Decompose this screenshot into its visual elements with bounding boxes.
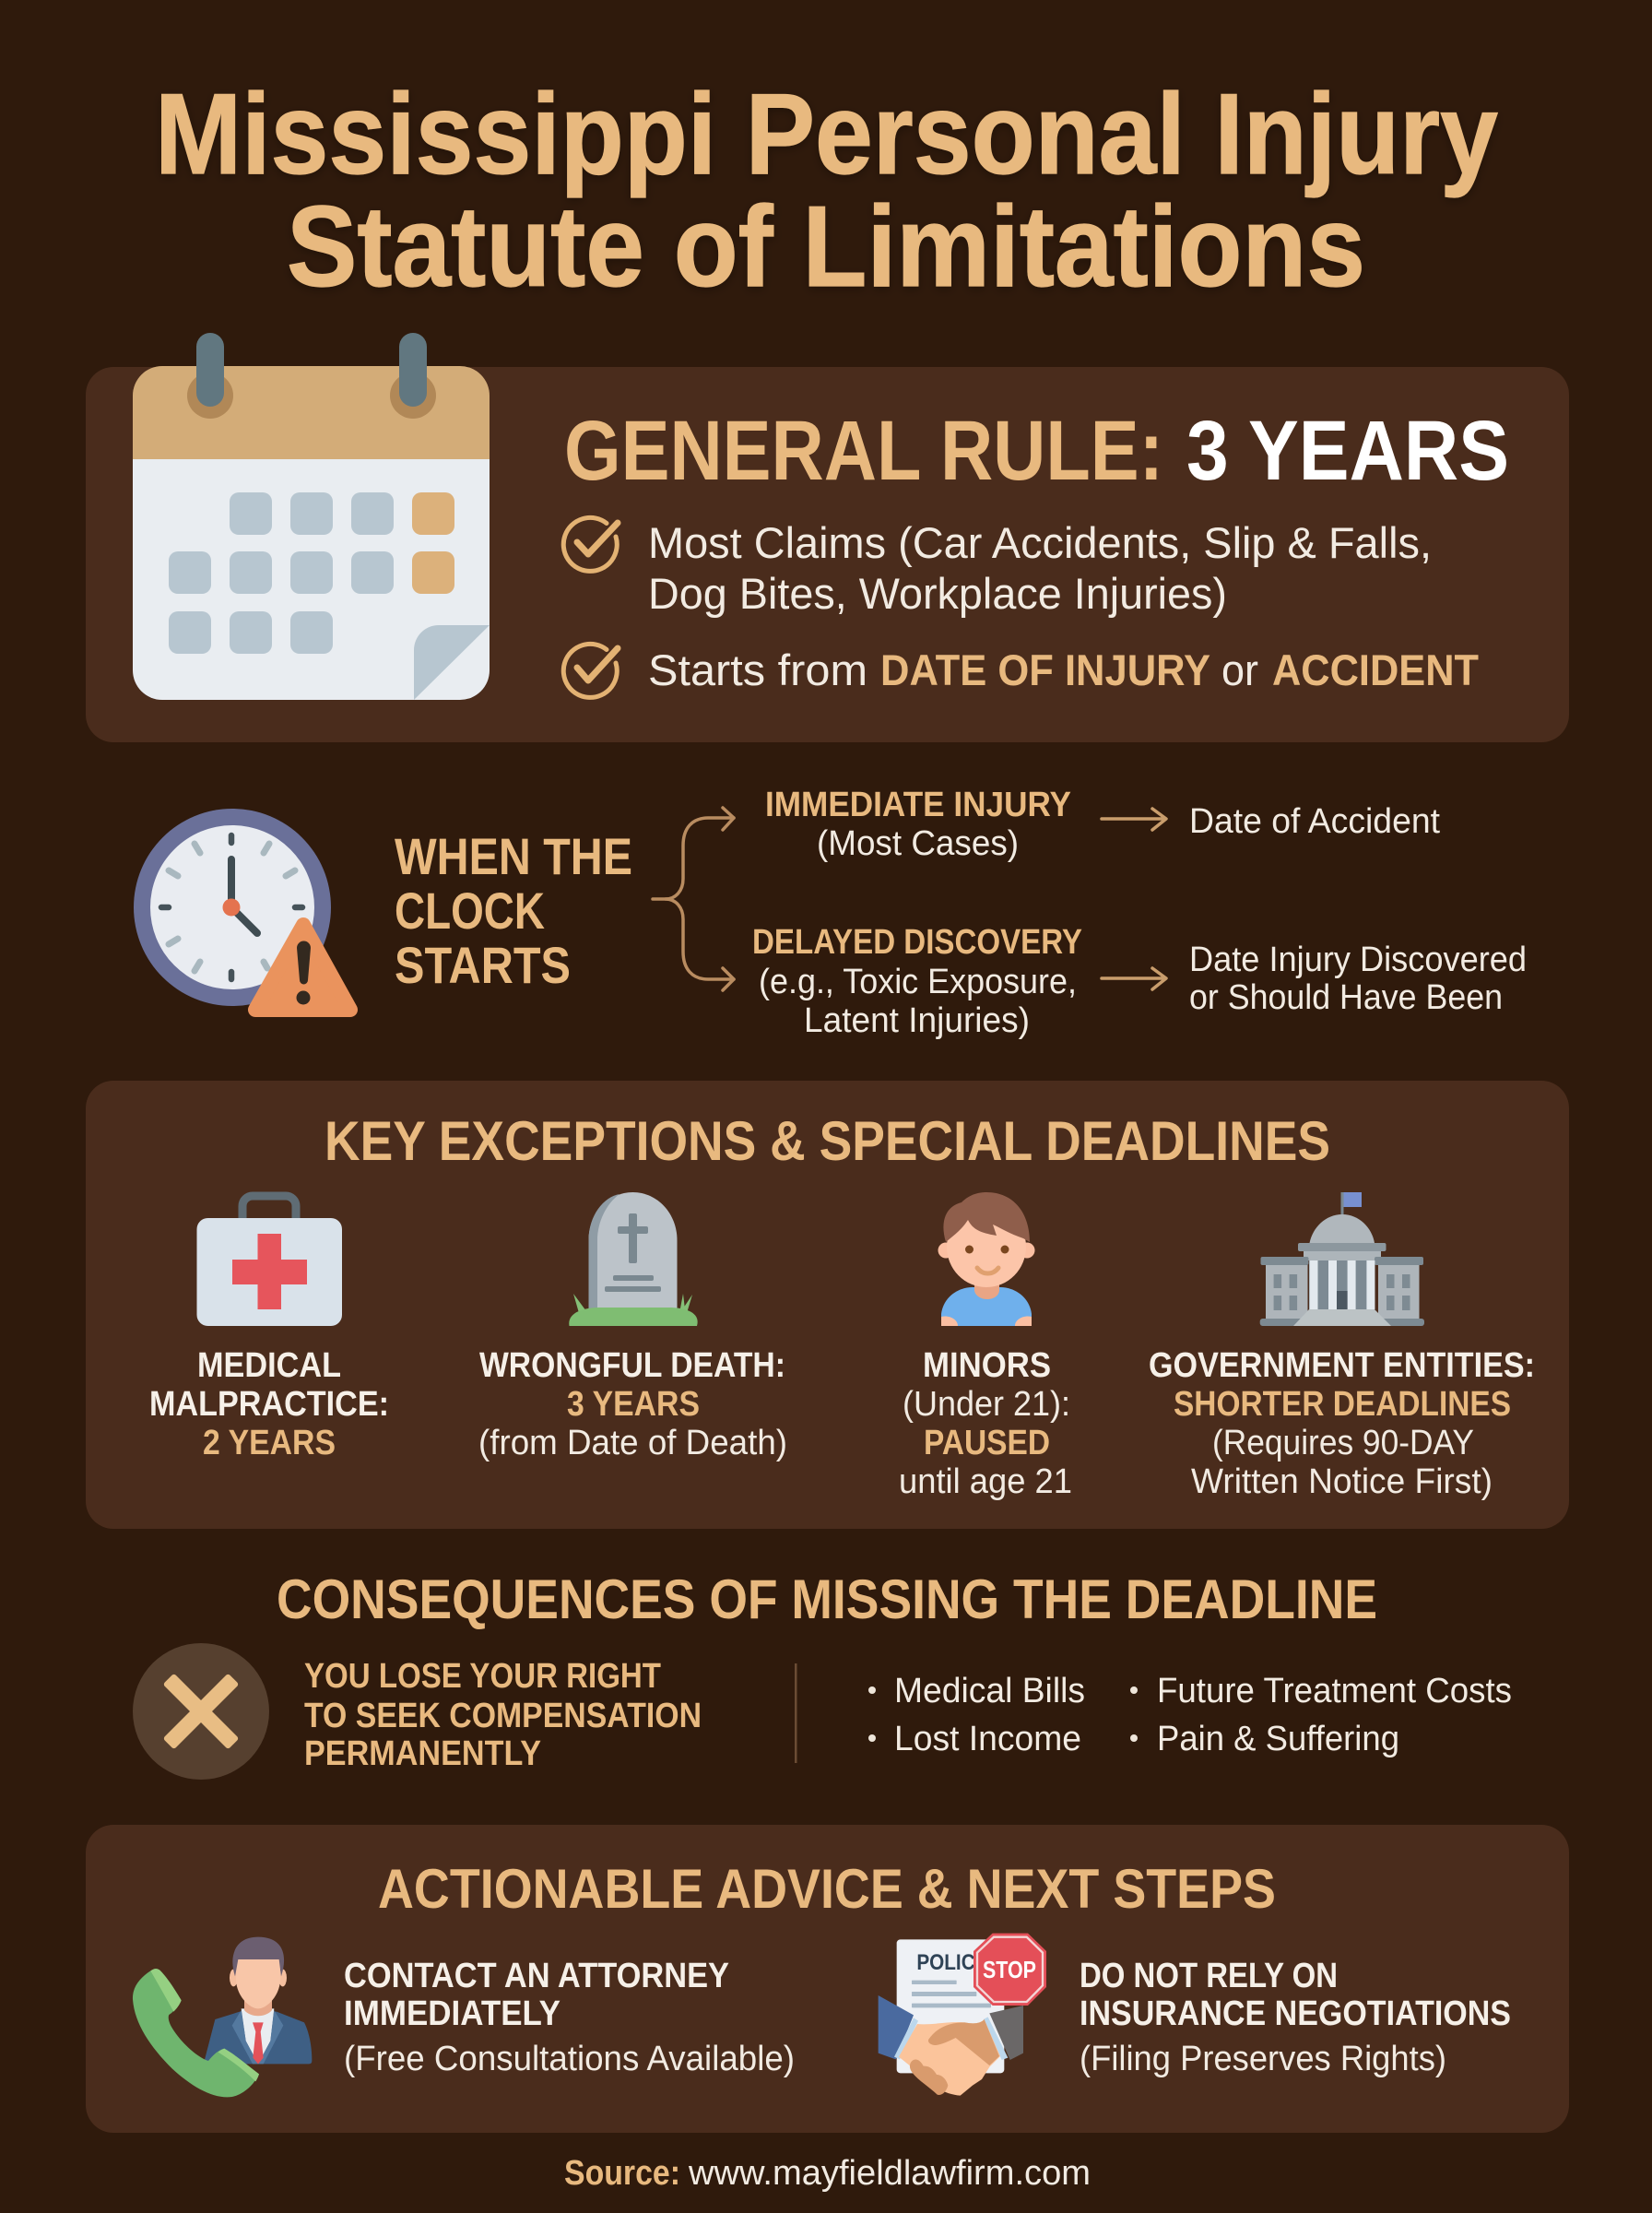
text: date of accident: Date of Accident <box>1189 802 1440 841</box>
text: date injury discovered: or Should Have Been <box>1189 978 1503 1017</box>
source line: www.mayfieldlawfirm.com <box>688 2154 1091 2193</box>
list: lost damages: Lost Income <box>894 1720 1081 1758</box>
text: starts from: or <box>1221 645 1258 694</box>
icon: calendar <box>133 333 490 700</box>
text: wrongful death <box>478 1346 787 1462</box>
text: starts from <box>648 645 1479 694</box>
icon: policy, handshake and stop sign: POLIC <box>916 1950 975 1975</box>
text: immediate injury: (Most Cases) <box>817 824 1019 863</box>
text: delayed discovery: (e.g., Toxic Exposure, <box>759 963 1077 1001</box>
text: government entities: SHORTER DEADLINES <box>1174 1385 1511 1424</box>
title: Mississippi Personal Injury <box>155 71 1498 198</box>
heading: when the clock starts: STARTS <box>395 936 571 994</box>
list: lost damages <box>868 1672 1512 1758</box>
text: do not rely on insurance <box>1080 1957 1511 2078</box>
text: do not rely on insurance: DO NOT RELY ON <box>1080 1957 1338 1995</box>
text: date injury discovered <box>1189 941 1527 1017</box>
heading: when the clock starts: CLOCK <box>395 882 545 940</box>
title: Statute of Limitations <box>287 183 1365 311</box>
heading: consequences: CONSEQUENCES OF MISSING THE DEADLINE <box>277 1568 1377 1630</box>
text: lose your right <box>304 1657 702 1773</box>
text: delayed discovery: Latent Injuries) <box>804 1001 1030 1040</box>
text: starts from: DATE OF INJURY <box>880 645 1210 694</box>
icon: medical kit <box>197 1196 342 1326</box>
text: minors <box>899 1346 1072 1501</box>
text: minors: until age 21 <box>899 1462 1072 1501</box>
icon: child <box>938 1192 1034 1326</box>
text: government entities <box>1149 1346 1535 1501</box>
text: government entities: Written Notice First) <box>1191 1462 1493 1501</box>
text: delayed discovery <box>752 923 1082 1040</box>
text: contact an attorney: CONTACT AN ATTORNEY <box>344 1957 729 1995</box>
arrow: delayed <box>1102 968 1166 989</box>
heading: actionable advice: ACTIONABLE ADVICE & NEXT STEPS <box>378 1858 1276 1920</box>
arrow: immediate <box>1102 809 1166 830</box>
text: most claims <box>648 518 1432 618</box>
heading: general rule: GENERAL RULE: <box>564 404 1163 498</box>
text: contact an attorney <box>344 1957 795 2078</box>
text: minors: (Under 21): <box>903 1385 1070 1424</box>
text: date injury discovered: Date Injury Discovered <box>1189 941 1527 979</box>
list: lost damages: Medical Bills <box>894 1672 1085 1710</box>
list: lost damages: Future Treatment Costs <box>1157 1672 1512 1710</box>
text: government entities: GOVERNMENT ENTITIES: <box>1149 1346 1535 1385</box>
text: contact an attorney: IMMEDIATELY <box>344 1994 560 2033</box>
text: starts from: Starts from <box>648 645 867 694</box>
icon: tombstone <box>569 1192 698 1326</box>
icon: attorney with phone <box>133 1937 312 2097</box>
text: lose your right: YOU LOSE YOUR RIGHT <box>304 1657 661 1696</box>
text: minors: PAUSED <box>924 1424 1050 1462</box>
text: medical malpractice: MALPRACTICE: <box>149 1385 389 1424</box>
text: government entities: (Requires 90-DAY <box>1212 1424 1474 1462</box>
icon: capitol building <box>1260 1192 1424 1326</box>
text: delayed discovery: DELAYED DISCOVERY <box>752 923 1082 962</box>
text: immediate injury: IMMEDIATE INJURY <box>765 786 1071 824</box>
icon: policy, handshake and stop sign: STOP <box>983 1956 1036 1983</box>
list: lost damages: Pain & Suffering <box>1157 1720 1399 1758</box>
text: wrongful death: 3 YEARS <box>567 1385 700 1424</box>
panel: general rule <box>86 333 1569 742</box>
icon: x in circle <box>133 1643 269 1780</box>
text: most claims: Most Claims (Car Accidents, Slip & Falls, <box>648 518 1432 567</box>
text: do not rely on insurance: (Filing Preserves Rights) <box>1080 2040 1446 2078</box>
icon: policy, handshake and stop sign <box>879 1934 1046 2096</box>
text: immediate injury <box>765 786 1071 863</box>
text: minors: MINORS <box>923 1346 1051 1385</box>
text: medical malpractice: 2 YEARS <box>203 1424 336 1462</box>
text: most claims: Dog Bites, Workplace Injuries) <box>648 569 1227 618</box>
panel: actionable advice <box>86 1825 1569 2133</box>
icon: clock with warning <box>134 809 350 1010</box>
icon: check badge <box>563 644 618 697</box>
text: do not rely on insurance: INSURANCE NEGOTIATIONS <box>1080 1994 1511 2033</box>
panel: key exceptions <box>86 1081 1569 1529</box>
text: wrongful death: (from Date of Death) <box>478 1424 787 1462</box>
title <box>155 71 1498 311</box>
heading: general rule: 3 YEARS <box>1186 404 1509 498</box>
text: medical malpractice <box>149 1346 389 1462</box>
source line: Source: <box>564 2154 680 2193</box>
text: contact an attorney: (Free Consultations Available) <box>344 2040 795 2078</box>
arrow: branching brace <box>653 808 734 990</box>
heading: key exceptions: KEY EXCEPTIONS & SPECIAL DEADLINES <box>324 1110 1330 1172</box>
heading: when the clock starts <box>395 827 632 994</box>
text: starts from: ACCIDENT <box>1272 645 1479 694</box>
text: wrongful death: WRONGFUL DEATH: <box>479 1346 785 1385</box>
heading: when the clock starts: WHEN THE <box>395 827 632 885</box>
text: lose your right: PERMANENTLY <box>304 1734 541 1773</box>
icon: check badge <box>563 517 618 571</box>
text: lose your right: TO SEEK COMPENSATION <box>304 1697 702 1735</box>
text: medical malpractice: MEDICAL <box>197 1346 341 1385</box>
